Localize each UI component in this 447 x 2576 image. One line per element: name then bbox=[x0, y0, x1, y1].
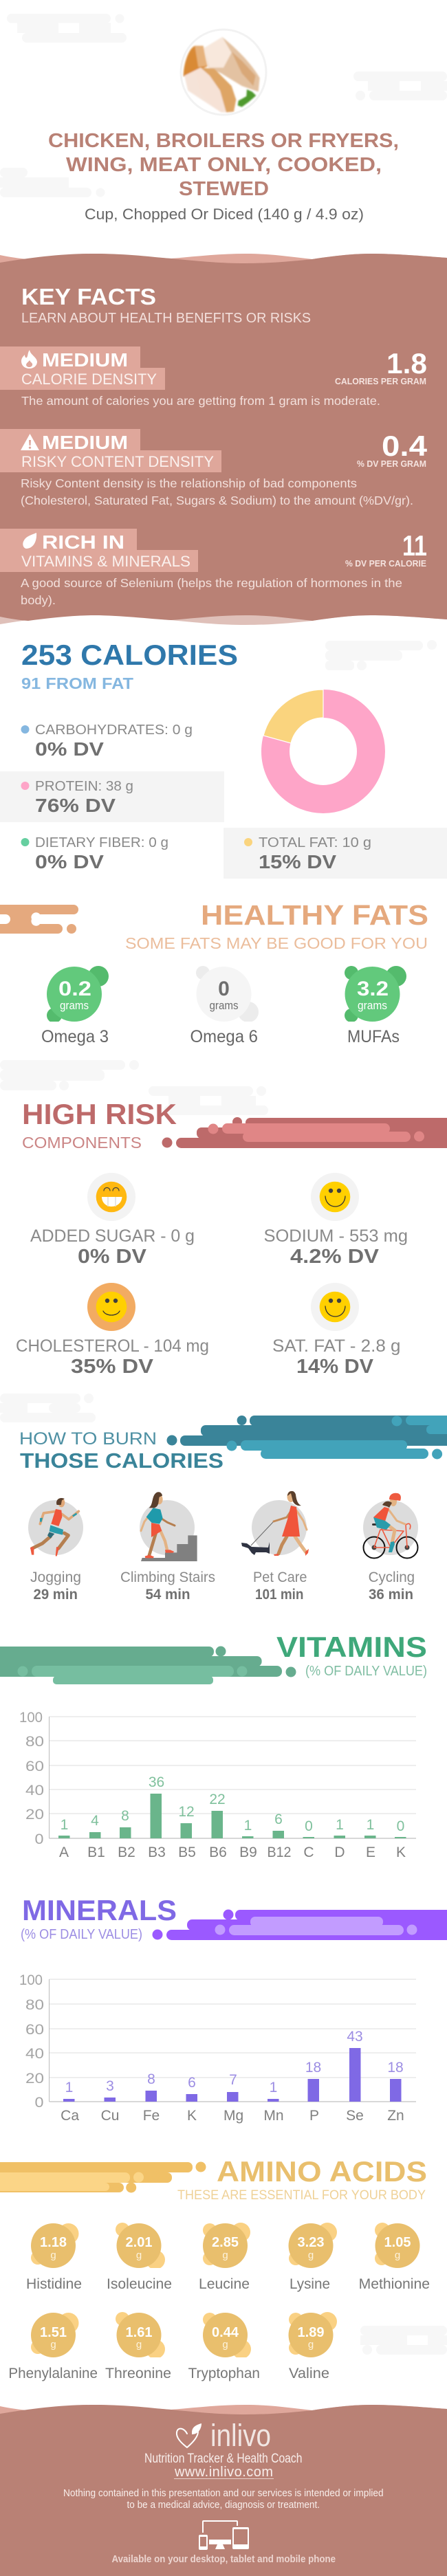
website link: www.inlivo.com bbox=[174, 2465, 273, 2480]
macro: carbohydrates: 0% DV bbox=[35, 738, 104, 760]
amino acids heading bbox=[0, 2155, 427, 2203]
amino: valine: 1.89 bbox=[298, 2325, 324, 2340]
high risk heading: HIGH RISK bbox=[22, 1098, 177, 1130]
bar chart: vitamins: B6 bbox=[209, 1845, 227, 1860]
amino: histidine: Histidine bbox=[26, 2276, 82, 2292]
tagline: Nutrition Tracker & Health Coach bbox=[144, 2452, 303, 2466]
high risk heading bbox=[22, 1098, 447, 1152]
bar chart: vitamins: 22 bbox=[209, 1792, 226, 1807]
bar chart: vitamins: 60 bbox=[25, 1759, 44, 1774]
rich in vitamins and minerals: body). bbox=[21, 593, 56, 607]
healthy fats heading: SOME FATS MAY BE GOOD FOR YOU bbox=[125, 934, 428, 952]
bar chart: vitamins: 0 bbox=[305, 1818, 313, 1834]
bar chart: vitamins: 0 bbox=[34, 1831, 44, 1847]
rich in vitamins and minerals: VITAMINS & MINERALS bbox=[21, 553, 190, 570]
amino: phenylalanine: Phenylalanine bbox=[8, 2366, 98, 2381]
icon: warning triangle bbox=[21, 434, 39, 450]
mufas: 3.2 bbox=[357, 978, 389, 1000]
amino: methionine bbox=[359, 2223, 430, 2292]
bar chart: vitamins: C bbox=[303, 1845, 314, 1860]
amino: methionine: 1.05 bbox=[384, 2235, 411, 2250]
activity: cycling bbox=[363, 1493, 418, 1603]
bar chart: minerals: 1 bbox=[65, 2080, 73, 2095]
bar chart: minerals: 8 bbox=[147, 2071, 155, 2087]
calorie density: CALORIE DENSITY bbox=[21, 371, 157, 388]
bar chart: minerals: 80 bbox=[25, 1997, 44, 2013]
bar chart: minerals: 6 bbox=[188, 2075, 196, 2091]
amino: phenylalanine: g bbox=[50, 2339, 56, 2351]
icon: fire bbox=[21, 350, 37, 368]
bar chart: minerals: 40 bbox=[25, 2046, 44, 2062]
amino: lysine bbox=[289, 2223, 337, 2292]
icon: leaf bbox=[23, 533, 36, 549]
risk: cholesterol bbox=[16, 1283, 209, 1378]
activity: pet care: Pet Care bbox=[253, 1570, 307, 1585]
bar chart: vitamins: 36 bbox=[149, 1774, 164, 1790]
amino: tryptophan bbox=[188, 2313, 260, 2381]
amino: isoleucine bbox=[107, 2223, 172, 2292]
omega 3: Omega 3 bbox=[41, 1027, 109, 1046]
bar chart: vitamins: 8 bbox=[121, 1808, 129, 1824]
bar chart: minerals: P bbox=[309, 2108, 319, 2124]
bar chart: minerals: 100 bbox=[19, 1972, 43, 1988]
disclaimer: to be a medical advice, diagnosis or treatment. bbox=[127, 2499, 320, 2511]
bar chart: vitamins: 1 bbox=[61, 1817, 68, 1833]
risky content density: Risky Content density is the relationship of bad components bbox=[21, 476, 357, 490]
bar chart: vitamins: 1 bbox=[244, 1818, 252, 1834]
mufas: MUFAs bbox=[347, 1027, 400, 1046]
vitamins heading: VITAMINS bbox=[276, 1631, 427, 1663]
bar chart: vitamins: B9 bbox=[239, 1845, 257, 1860]
mufas bbox=[345, 966, 406, 1046]
bar chart: vitamins: B2 bbox=[118, 1845, 135, 1860]
amino: leucine: 2.85 bbox=[212, 2235, 239, 2250]
activity: climbing stairs: 54 min bbox=[146, 1587, 190, 1603]
activity: climbing stairs bbox=[120, 1492, 215, 1603]
bar chart: vitamins bbox=[19, 1710, 416, 1860]
disclaimer: Nothing contained in this presentation and our services is intended or implied bbox=[63, 2487, 384, 2499]
risk: added sugar: 0% DV bbox=[78, 1246, 147, 1268]
activity: pet care: 101 min bbox=[255, 1587, 304, 1603]
risk: saturated fat: 14% DV bbox=[296, 1356, 374, 1378]
minerals heading bbox=[21, 1894, 447, 1942]
calorie density: 1.8 bbox=[386, 347, 427, 379]
donut chart bbox=[263, 690, 371, 799]
bar chart: vitamins: K bbox=[396, 1845, 406, 1860]
risk: sodium: SODIUM - 553 mg bbox=[264, 1226, 408, 1246]
bar chart: minerals: 0 bbox=[34, 2095, 44, 2111]
burn calories heading: HOW TO BURN bbox=[19, 1429, 157, 1449]
amino: histidine: 1.18 bbox=[40, 2235, 67, 2250]
activity: jogging: 29 min bbox=[33, 1587, 78, 1603]
amino: leucine: g bbox=[222, 2249, 228, 2261]
rich in vitamins and minerals: A good source of Selenium (helps the regulation of hormones in the bbox=[21, 576, 402, 590]
minerals heading: (% OF DAILY VALUE) bbox=[21, 1927, 142, 1942]
healthy fats heading: HEALTHY FATS bbox=[201, 899, 428, 931]
risk: sodium: 4.2% DV bbox=[290, 1246, 380, 1268]
risky content density: (Cholesterol, Saturated Fat, Sugars & Sodium) to the amount (%DV/gr). bbox=[21, 494, 413, 507]
availability note: Available on your desktop, tablet and mobile phone bbox=[111, 2553, 336, 2565]
calories from fat: 91 FROM FAT bbox=[21, 674, 133, 692]
macro: total fat: 15% DV bbox=[259, 851, 336, 872]
macro: protein: PROTEIN: 38 g bbox=[35, 779, 133, 794]
calories heading: 253 CALORIES bbox=[21, 639, 238, 671]
macro: total fat: TOTAL FAT: 10 g bbox=[259, 835, 371, 850]
bar chart: minerals: Mn bbox=[263, 2108, 284, 2124]
amino: leucine: Leucine bbox=[199, 2276, 250, 2292]
activity: climbing stairs: Climbing Stairs bbox=[120, 1570, 215, 1585]
risky content density bbox=[0, 429, 428, 507]
macro: carbohydrates bbox=[21, 723, 193, 760]
minerals heading: MINERALS bbox=[22, 1894, 177, 1926]
amino: valine bbox=[289, 2312, 337, 2381]
omega 6 bbox=[190, 966, 259, 1046]
key facts heading: KEY FACTS bbox=[21, 284, 156, 309]
bar chart: minerals: 3 bbox=[106, 2078, 114, 2094]
risk: added sugar bbox=[30, 1173, 195, 1268]
bar chart: minerals: Ca bbox=[61, 2108, 79, 2124]
amino: phenylalanine: 1.51 bbox=[40, 2325, 67, 2340]
amino: threonine: Threonine bbox=[105, 2366, 171, 2381]
amino: tryptophan: g bbox=[222, 2339, 228, 2351]
calorie density: MEDIUM bbox=[42, 349, 128, 371]
bar chart: vitamins: E bbox=[366, 1845, 375, 1860]
bar chart: vitamins: D bbox=[334, 1845, 345, 1860]
bar chart: vitamins: A bbox=[59, 1845, 69, 1860]
amino: lysine: 3.23 bbox=[298, 2235, 324, 2250]
risky content density: MEDIUM bbox=[42, 432, 128, 453]
bar chart: vitamins: 1 bbox=[336, 1817, 344, 1833]
panel: footer bbox=[0, 2405, 447, 2576]
rich in vitamins and minerals bbox=[0, 529, 427, 607]
bar chart: minerals: 7 bbox=[229, 2072, 237, 2088]
amino: phenylalanine bbox=[8, 2313, 98, 2381]
calorie density: The amount of calories you are getting from 1 gram is moderate. bbox=[21, 394, 380, 408]
bar chart: vitamins: B5 bbox=[178, 1845, 196, 1860]
bar chart: vitamins: 12 bbox=[178, 1804, 195, 1820]
activity: pet care bbox=[241, 1491, 309, 1603]
activity: jogging bbox=[28, 1498, 83, 1603]
bar chart: minerals: Cu bbox=[101, 2108, 119, 2124]
bar chart: minerals: Fe bbox=[143, 2108, 160, 2124]
bar chart: minerals: Zn bbox=[387, 2108, 404, 2124]
bar chart: minerals: 18 bbox=[387, 2060, 404, 2076]
title: STEWED bbox=[179, 178, 269, 200]
amino: threonine bbox=[105, 2312, 171, 2381]
amino: methionine: g bbox=[395, 2249, 400, 2261]
risk: added sugar: ADDED SUGAR - 0 g bbox=[30, 1226, 195, 1246]
amino: histidine bbox=[26, 2223, 82, 2292]
bar chart: minerals: 20 bbox=[25, 2071, 44, 2087]
vitamins heading bbox=[0, 1631, 427, 1684]
title: WING, MEAT ONLY, COOKED, bbox=[66, 154, 382, 176]
mufas: grams bbox=[358, 999, 387, 1012]
bar chart: minerals: K bbox=[187, 2108, 197, 2124]
rich in vitamins and minerals: 11 bbox=[402, 529, 427, 562]
macro: protein: 76% DV bbox=[35, 795, 116, 816]
icon: devices bbox=[199, 2520, 249, 2550]
bar chart: vitamins: 4 bbox=[91, 1813, 99, 1829]
risky content density: RISKY CONTENT DENSITY bbox=[21, 453, 214, 470]
omega 3: grams bbox=[60, 999, 89, 1012]
risk: cholesterol: CHOLESTEROL - 104 mg bbox=[16, 1336, 209, 1356]
title: CHICKEN, BROILERS OR FRYERS, bbox=[48, 130, 399, 152]
bar chart: vitamins: 1 bbox=[367, 1817, 374, 1833]
header: food photo of chicken bbox=[181, 30, 266, 115]
bar chart: vitamins: B3 bbox=[148, 1845, 166, 1860]
risk: saturated fat bbox=[272, 1283, 400, 1378]
key facts subheading: LEARN ABOUT HEALTH BENEFITS OR RISKS bbox=[21, 311, 311, 326]
omega 3 bbox=[41, 966, 109, 1046]
omega 6: 0 bbox=[218, 978, 230, 1000]
amino: lysine: g bbox=[308, 2249, 314, 2261]
amino: lysine: Lysine bbox=[290, 2276, 330, 2292]
activity: cycling: 36 min bbox=[369, 1587, 413, 1603]
bar chart: minerals: Se bbox=[346, 2108, 364, 2124]
bar chart: vitamins: 80 bbox=[25, 1734, 44, 1750]
amino: isoleucine: Isoleucine bbox=[107, 2276, 172, 2292]
bar chart: minerals: Mg bbox=[224, 2108, 243, 2124]
risk: saturated fat: SAT. FAT - 2.8 g bbox=[272, 1336, 400, 1356]
amino acids heading: AMINO ACIDS bbox=[217, 2155, 427, 2188]
healthy fats heading bbox=[0, 899, 428, 952]
activity: jogging: Jogging bbox=[30, 1570, 81, 1585]
bar chart: minerals bbox=[19, 1972, 416, 2124]
logo: inlivo bbox=[177, 2418, 271, 2453]
title bbox=[48, 130, 399, 200]
macro: total fat bbox=[224, 828, 447, 879]
risky content density: 0.4 bbox=[382, 430, 428, 462]
amino: threonine: g bbox=[136, 2339, 142, 2351]
amino: threonine: 1.61 bbox=[126, 2325, 152, 2340]
calorie density bbox=[0, 346, 427, 408]
bar chart: minerals: 43 bbox=[347, 2029, 363, 2045]
activity: cycling: Cycling bbox=[369, 1570, 415, 1585]
amino: valine: g bbox=[308, 2339, 314, 2351]
macro: dietary fiber: DIETARY FIBER: 0 g bbox=[35, 835, 168, 850]
omega 3: 0.2 bbox=[58, 978, 91, 1000]
disclaimer bbox=[63, 2487, 384, 2511]
bar chart: vitamins: 0 bbox=[397, 1818, 404, 1834]
macro: carbohydrates: CARBOHYDRATES: 0 g bbox=[35, 723, 193, 738]
rich in vitamins and minerals: % DV PER CALORIE bbox=[345, 558, 426, 569]
macro: dietary fiber: 0% DV bbox=[35, 851, 104, 872]
bar chart: vitamins: 6 bbox=[274, 1812, 283, 1827]
bar chart: minerals: 60 bbox=[25, 2022, 44, 2038]
bar chart: vitamins: 100 bbox=[19, 1710, 43, 1726]
macro: protein bbox=[0, 771, 224, 822]
amino acids heading: THESE ARE ESSENTIAL FOR YOUR BODY bbox=[177, 2188, 426, 2203]
amino: tryptophan: 0.44 bbox=[212, 2325, 239, 2340]
amino: histidine: g bbox=[50, 2249, 56, 2261]
amino: isoleucine: 2.01 bbox=[126, 2235, 152, 2250]
amino: tryptophan: Tryptophan bbox=[188, 2366, 260, 2381]
burn calories heading: THOSE CALORIES bbox=[20, 1449, 224, 1473]
burn calories heading bbox=[19, 1416, 447, 1473]
macro: dietary fiber bbox=[21, 835, 168, 872]
amino: isoleucine: g bbox=[136, 2249, 142, 2261]
bar chart: minerals: 18 bbox=[305, 2060, 321, 2076]
bar chart: minerals: 1 bbox=[270, 2080, 277, 2095]
risk: cholesterol: 35% DV bbox=[71, 1356, 154, 1378]
amino: valine: Valine bbox=[289, 2366, 329, 2381]
omega 6: grams bbox=[209, 999, 238, 1012]
amino: methionine: Methionine bbox=[359, 2276, 430, 2292]
risk: sodium bbox=[264, 1173, 408, 1268]
bar chart: vitamins: B12 bbox=[267, 1845, 292, 1860]
high risk heading: COMPONENTS bbox=[22, 1134, 142, 1152]
bar chart: vitamins: 40 bbox=[25, 1783, 44, 1798]
serving size subtitle: Cup, Chopped Or Diced (140 g / 4.9 oz) bbox=[85, 206, 364, 223]
vitamins heading: (% OF DAILY VALUE) bbox=[305, 1664, 427, 1679]
bar chart: vitamins: B1 bbox=[87, 1845, 105, 1860]
omega 6: Omega 6 bbox=[190, 1027, 258, 1046]
panel: key facts bbox=[0, 254, 447, 625]
bar chart: vitamins: 20 bbox=[25, 1807, 44, 1823]
logo: inlivo: inlivo bbox=[210, 2418, 271, 2453]
amino: leucine bbox=[199, 2223, 250, 2292]
risky content density: % DV PER GRAM bbox=[357, 459, 426, 469]
rich in vitamins and minerals: RICH IN bbox=[42, 531, 124, 553]
calorie density: CALORIES PER GRAM bbox=[335, 376, 426, 386]
